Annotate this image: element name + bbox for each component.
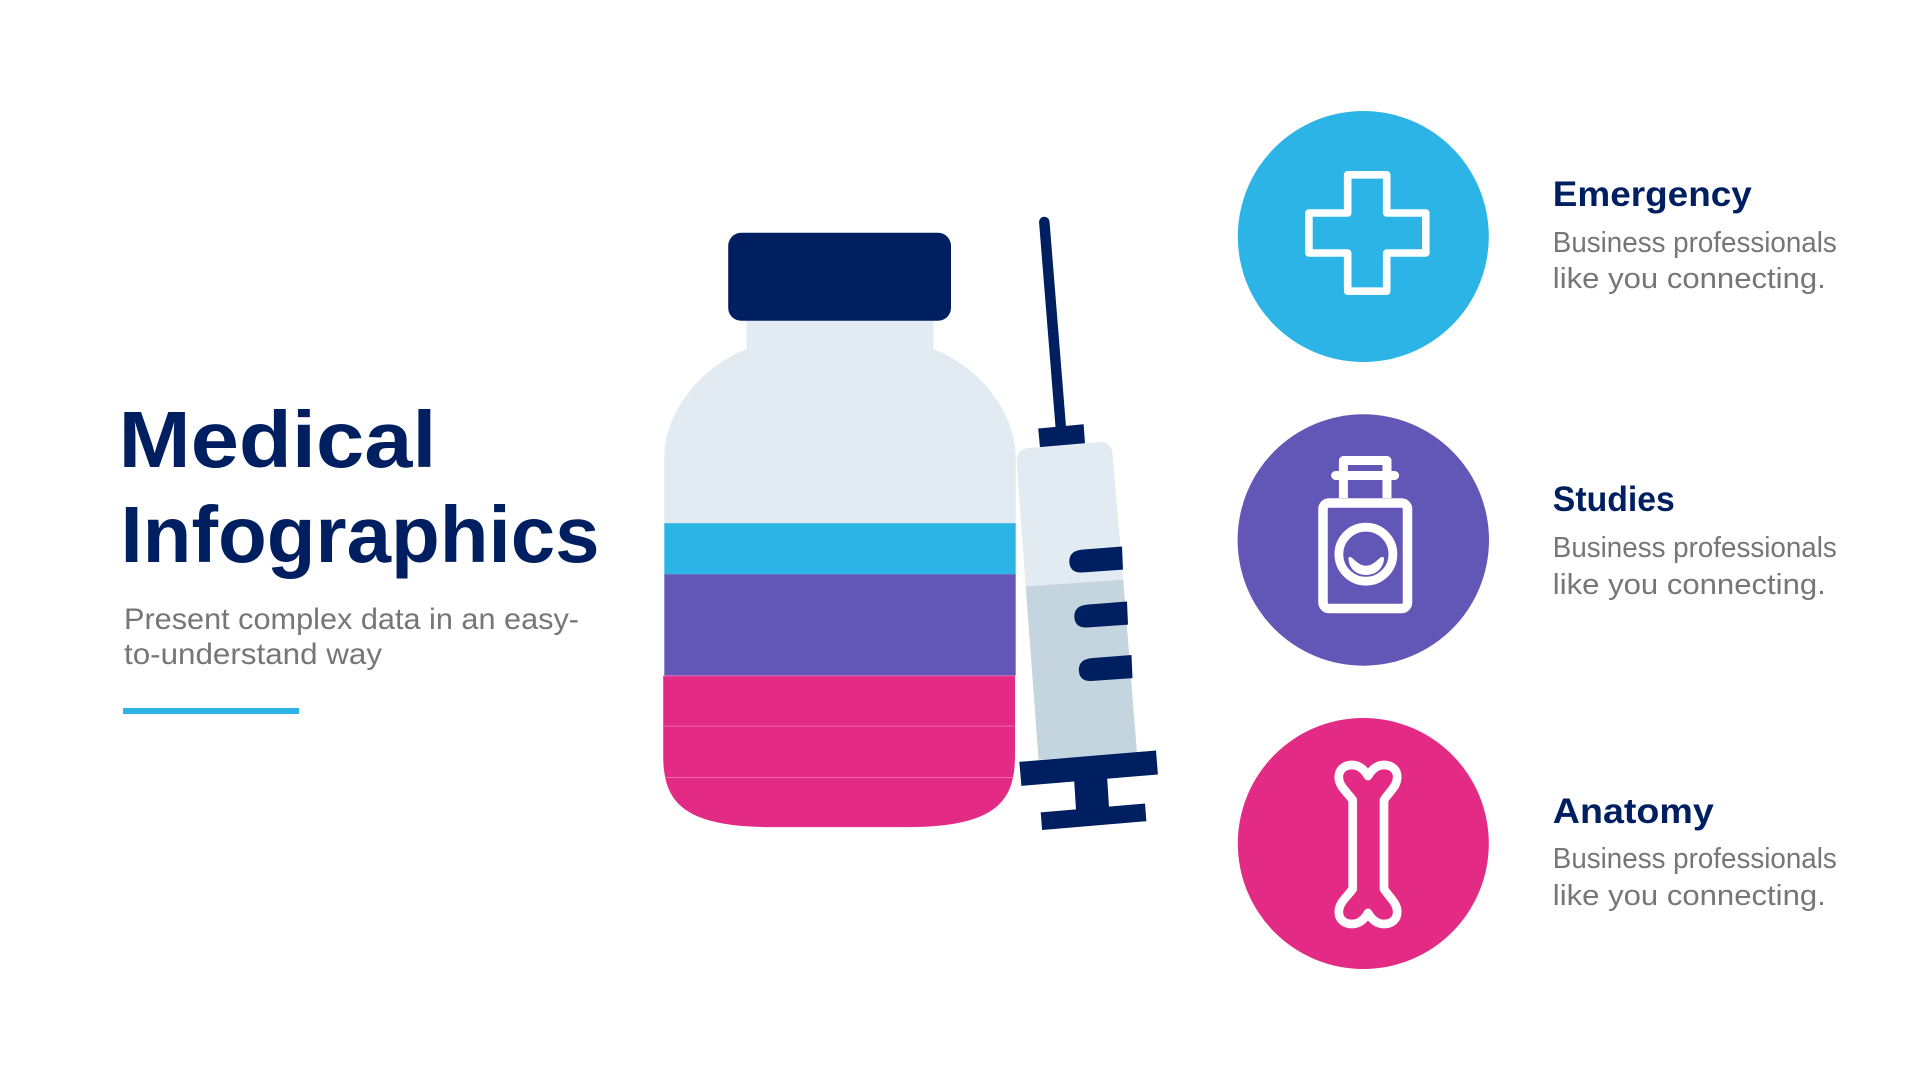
needle hub <box>1038 424 1085 448</box>
anatomy circle <box>1238 718 1489 969</box>
title: Infographics <box>120 490 600 579</box>
blue band <box>664 523 1016 574</box>
bottle upper glass <box>664 320 1016 524</box>
subtitle text <box>124 603 579 671</box>
anatomy description: Business professionals <box>1553 843 1837 875</box>
pink band <box>663 676 1015 827</box>
barrel lower <box>1026 580 1137 760</box>
medicine bottle illustration <box>663 233 1016 827</box>
studies heading: Studies <box>1553 480 1675 519</box>
icon: medical cross <box>1309 175 1426 291</box>
panel: anatomy <box>1238 718 1837 969</box>
emergency description: like you connecting. <box>1553 263 1826 295</box>
plunger <box>1019 750 1158 830</box>
emergency description: Business professionals <box>1553 227 1837 259</box>
studies circle <box>1238 414 1489 666</box>
studies description: like you connecting. <box>1553 569 1826 601</box>
title: Medical <box>118 395 436 484</box>
icon: bone <box>1339 765 1397 924</box>
subtitle text: to-understand way <box>124 638 382 671</box>
title <box>118 395 600 579</box>
needle <box>1044 222 1061 430</box>
icon: bottle <box>1323 460 1408 608</box>
panel: studies <box>1238 414 1837 666</box>
pink band separators <box>663 676 1015 777</box>
studies description <box>1553 532 1837 601</box>
anatomy description <box>1553 843 1837 912</box>
studies description: Business professionals <box>1553 532 1837 564</box>
syringe illustration <box>1017 222 1158 830</box>
graduation marks <box>1069 546 1132 681</box>
barrel upper <box>1017 442 1123 586</box>
emergency description <box>1553 227 1837 295</box>
panel: emergency <box>1238 111 1837 362</box>
accent underline <box>123 708 299 714</box>
emergency heading: Emergency <box>1553 175 1752 214</box>
bottle cap <box>728 233 951 321</box>
purple band <box>664 574 1016 676</box>
emergency circle <box>1238 111 1489 362</box>
anatomy heading: Anatomy <box>1553 792 1714 831</box>
subtitle text: Present complex data in an easy- <box>124 603 579 636</box>
anatomy description: like you connecting. <box>1553 880 1826 912</box>
